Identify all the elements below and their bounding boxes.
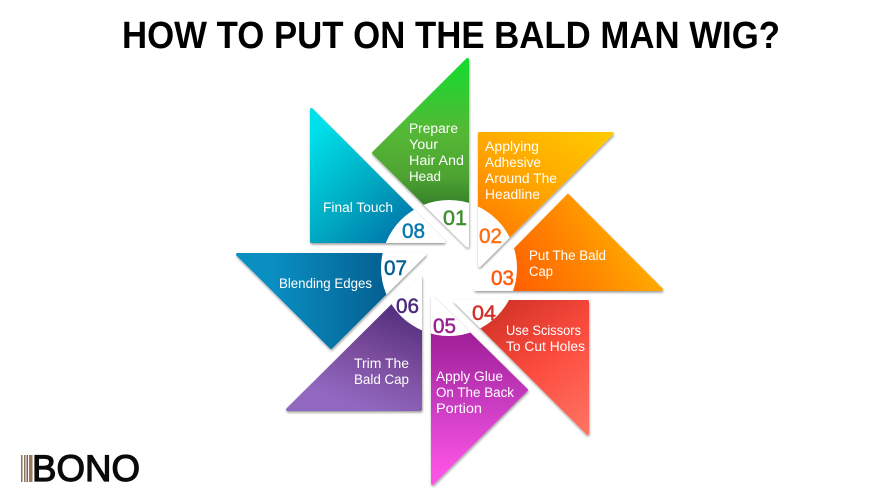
step 01 label <box>409 121 464 184</box>
step 02 label <box>485 139 557 202</box>
step 02 label: Applying <box>485 139 539 154</box>
step 03: put the bald cap <box>476 196 662 290</box>
step 01 label: Hair And <box>409 153 464 168</box>
step 02 label: Headline <box>485 187 540 202</box>
step 05 triangle <box>432 298 526 484</box>
step 02 number: 02 <box>479 225 502 248</box>
logo stripes <box>21 455 32 482</box>
step 08: final touch <box>312 110 444 243</box>
step 05: apply glue <box>432 298 526 484</box>
step 02: applying adhesive <box>479 134 612 266</box>
step 04 number: 04 <box>472 302 496 325</box>
step 01 triangle <box>374 60 468 246</box>
step 06 label <box>354 356 409 387</box>
step 06 triangle <box>288 278 420 410</box>
step 01 label: Prepare <box>409 121 458 136</box>
step 07: blending edges <box>238 254 424 348</box>
step 03 label: Put The Bald <box>529 248 606 263</box>
step 05 label: Portion <box>436 401 482 416</box>
step 01: prepare hair <box>374 60 468 246</box>
step 02 label: Around The <box>485 171 557 186</box>
step 06 label: Bald Cap <box>354 372 409 387</box>
step 06 label: Trim The <box>354 356 409 371</box>
logo: BONO <box>21 448 140 489</box>
step 06 number: 06 <box>396 295 419 318</box>
step 01 number: 01 <box>443 207 467 230</box>
step 05 label <box>436 369 514 416</box>
step 06: trim the bald cap <box>288 278 420 410</box>
step 07 number: 07 <box>384 257 407 280</box>
step 02 label: Adhesive <box>485 155 541 170</box>
step 07 triangle <box>238 254 424 348</box>
step 02 triangle <box>480 134 612 266</box>
step 08 label: Final Touch <box>323 200 393 215</box>
step 03 label <box>529 248 606 279</box>
step 04 label <box>506 323 585 354</box>
logo wordmark: BONO <box>32 448 140 489</box>
step 05 label: Apply Glue <box>436 369 503 384</box>
step 04: use scissors <box>456 302 588 434</box>
step 08 number: 08 <box>402 220 425 243</box>
step 05 number: 05 <box>433 315 456 338</box>
step 04 label: Use Scissors <box>506 323 581 338</box>
step 04 triangle <box>456 302 588 434</box>
step 03 number: 03 <box>491 267 514 290</box>
title: HOW TO PUT ON THE BALD MAN WIG? <box>122 15 780 57</box>
step 07 label: Blending Edges <box>279 276 372 291</box>
step 05 label: On The Back <box>436 385 514 400</box>
step 01 label: Head <box>409 169 441 184</box>
step 04 label: To Cut Holes <box>506 339 585 354</box>
step 01 label: Your <box>409 137 439 152</box>
step 03 triangle <box>476 196 662 290</box>
step 08 triangle <box>312 110 444 242</box>
step 03 label: Cap <box>529 264 553 279</box>
